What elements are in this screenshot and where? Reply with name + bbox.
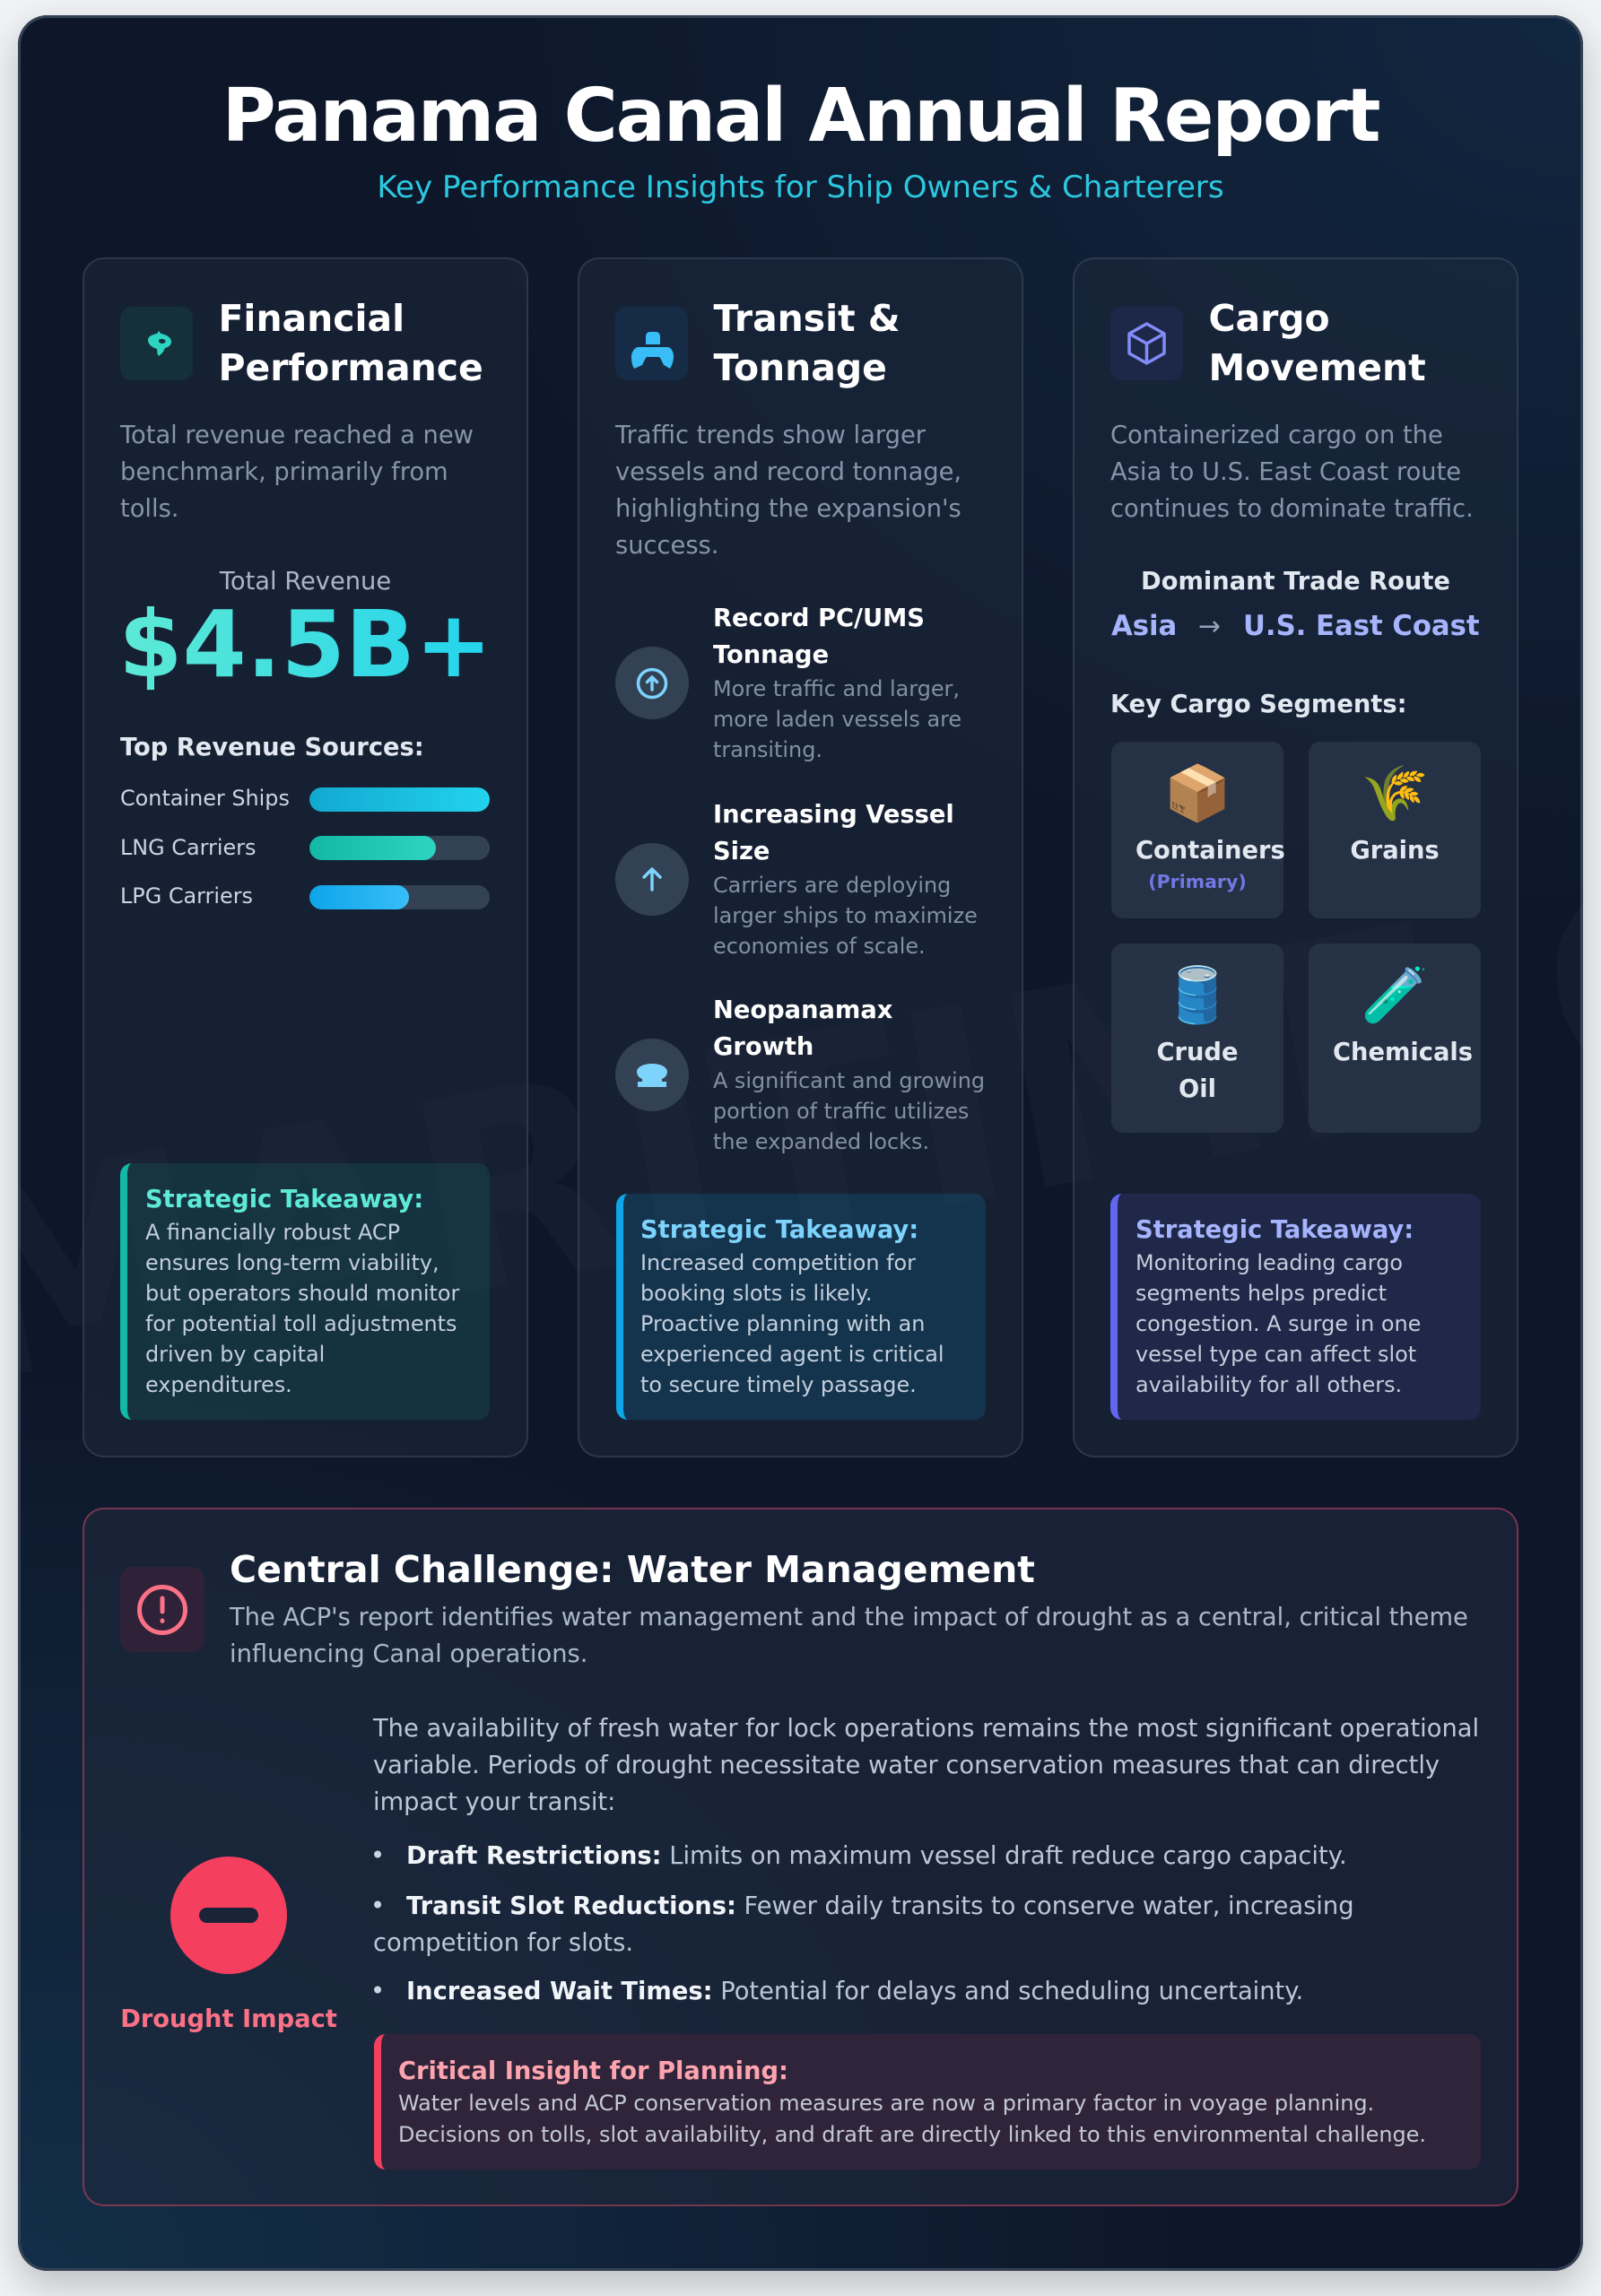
icon: minus bar xyxy=(199,1908,258,1923)
item title: Neopanamax xyxy=(713,996,892,1024)
callout text: expenditures. xyxy=(145,1372,292,1397)
item title: Growth xyxy=(713,1033,814,1061)
item: record tonnage xyxy=(615,604,961,762)
tile label: Containers xyxy=(1135,837,1285,865)
drought label: Drought Impact xyxy=(120,2005,337,2032)
list item: draft restrictions: Draft Restrictions: Limits on maximum vessel draft reduce cargo capacity. xyxy=(406,1842,1347,1870)
heading: top revenue sources: Top Revenue Sources: xyxy=(120,734,424,761)
body text xyxy=(373,1715,1479,1816)
description: tolls. xyxy=(120,495,178,523)
description xyxy=(615,422,961,560)
item text: larger ships to maximize xyxy=(713,902,978,927)
callout: financial takeaway xyxy=(120,1163,490,1420)
icon: test tube: 🧪 xyxy=(1361,963,1429,1027)
heading: financial performance: Financial xyxy=(219,297,405,340)
body text: impact your transit: xyxy=(373,1788,615,1816)
total revenue label: Total Revenue xyxy=(220,568,391,596)
description xyxy=(120,422,474,523)
tile label: Oil xyxy=(1179,1074,1216,1103)
list item: slot reductions xyxy=(370,1892,1354,1957)
tile label: Grains xyxy=(1350,837,1440,865)
callout text xyxy=(640,1250,944,1397)
panel: cargo movement xyxy=(1073,257,1518,1457)
impact list xyxy=(370,1842,1354,2005)
item text: economies of scale. xyxy=(713,933,926,958)
callout text xyxy=(145,1220,459,1397)
icon: oil drum: 🛢️ xyxy=(1163,963,1231,1027)
icon: up arrow xyxy=(615,843,689,915)
item text xyxy=(713,676,961,762)
intro text xyxy=(230,1604,1468,1668)
description: benchmark, primarily from xyxy=(120,458,448,486)
description: Total revenue reached a new xyxy=(120,422,474,449)
callout: cargo takeaway xyxy=(1110,1194,1481,1420)
callout text: A financially robust ACP xyxy=(145,1220,400,1245)
route arrow: → xyxy=(1198,611,1221,642)
bar: LPG carriers xyxy=(309,885,490,909)
tile: chemicals xyxy=(1309,944,1481,1133)
callout title: Strategic Takeaway: xyxy=(145,1186,423,1213)
heading: key cargo segments: Key Cargo Segments: xyxy=(1110,691,1407,718)
item text: transiting. xyxy=(713,737,822,762)
item text xyxy=(713,1068,985,1154)
callout text: Decisions on tolls, slot availability, and draft are directly linked to this environmental challenge. xyxy=(398,2122,1426,2147)
list item: wait times: • xyxy=(370,1977,385,2005)
item: neopanamax growth xyxy=(615,996,985,1154)
panel: financial performance xyxy=(83,257,528,1457)
icon: alert xyxy=(120,1567,204,1652)
tile label xyxy=(1157,1039,1238,1103)
heading: central challenge: Central Challenge: Water Management xyxy=(230,1548,1035,1591)
body text: The availability of fresh water for lock operations remains the most significant operational xyxy=(373,1715,1479,1743)
callout: transit takeaway xyxy=(616,1194,986,1420)
list item: slot reductions: Transit Slot Reductions: Fewer daily transits to conserve water, increasing xyxy=(406,1892,1354,1919)
icon: up arrow circle xyxy=(615,647,689,719)
intro text: The ACP's report identifies water management and the impact of drought as a central, critical theme xyxy=(230,1604,1468,1631)
tile: crude oil xyxy=(1111,944,1283,1133)
icon: grain: 🌾 xyxy=(1361,761,1429,825)
callout text: to secure timely passage. xyxy=(640,1372,917,1397)
item title: Record PC/UMS xyxy=(713,604,925,632)
icon: transit xyxy=(615,307,688,380)
tile label: Crude xyxy=(1157,1039,1238,1065)
route destination: U.S. East Coast xyxy=(1243,611,1480,642)
item text: Carriers are deploying xyxy=(713,872,951,897)
title: Panama Canal Annual Report xyxy=(222,74,1379,159)
bar: container ships xyxy=(309,787,490,812)
bar: LNG carriers xyxy=(309,836,490,860)
description xyxy=(1110,422,1474,523)
callout text: Water levels and ACP conservation measures are now a primary factor in voyage planning. xyxy=(398,2091,1374,2116)
heading: dominant trade route: Dominant Trade Route xyxy=(1141,568,1450,596)
item text xyxy=(713,872,978,958)
callout text: driven by capital xyxy=(145,1342,325,1367)
item text: more laden vessels are xyxy=(713,707,961,732)
item text: the expanded locks. xyxy=(713,1129,929,1154)
description: vessels and record tonnage, xyxy=(615,458,961,486)
drought impact graphic xyxy=(120,1857,337,2032)
item text: More traffic and larger, xyxy=(713,676,960,701)
callout text: booking slots is likely. xyxy=(640,1281,872,1306)
bar label: container ships: Container Ships xyxy=(120,786,290,811)
callout text: experienced agent is critical xyxy=(640,1342,944,1367)
callout text: availability for all others. xyxy=(1135,1372,1402,1397)
item title: Tonnage xyxy=(713,641,829,669)
callout text: but operators should monitor xyxy=(145,1281,459,1306)
trade route xyxy=(1111,611,1480,642)
callout text: Increased competition for xyxy=(640,1250,916,1275)
callout text: Monitoring leading cargo xyxy=(1135,1250,1403,1275)
heading: transit and tonnage: Tonnage xyxy=(714,346,887,389)
description: success. xyxy=(615,532,718,560)
callout title: Strategic Takeaway: xyxy=(1135,1216,1414,1244)
icon: drought xyxy=(170,1857,287,1974)
heading: cargo movement xyxy=(1209,297,1426,389)
description: Traffic trends show larger xyxy=(615,422,926,449)
body text: variable. Periods of drought necessitate water conservation measures that can directly xyxy=(373,1752,1440,1779)
tile sublabel: (Primary) xyxy=(1148,871,1247,892)
heading: financial performance: Performance xyxy=(219,346,483,389)
item title xyxy=(713,800,954,865)
heading: transit and tonnage: Transit & xyxy=(714,297,901,340)
tile: containers xyxy=(1111,742,1283,918)
bar label: LNG carriers: LNG Carriers xyxy=(120,835,256,860)
callout title: Strategic Takeaway: xyxy=(640,1216,918,1244)
heading: financial performance xyxy=(219,297,483,389)
icon: package: 📦 xyxy=(1163,761,1231,825)
item title xyxy=(713,604,925,669)
tile: grains xyxy=(1309,742,1481,918)
item text: A significant and growing xyxy=(713,1068,985,1093)
subtitle: Key Performance Insights for Ship Owners & Charterers xyxy=(377,170,1224,205)
callout text: vessel type can affect slot xyxy=(1135,1342,1416,1367)
heading: cargo movement: Movement xyxy=(1209,346,1426,389)
list item: draft restrictions: • xyxy=(370,1842,385,1870)
intro text: influencing Canal operations. xyxy=(230,1640,587,1668)
heading: cargo movement: Cargo xyxy=(1209,297,1330,340)
callout text xyxy=(398,2091,1426,2147)
bar chart: revenue sources xyxy=(120,786,490,909)
callout title: Critical Insight for Planning: xyxy=(398,2057,788,2085)
callout text: Proactive planning with an xyxy=(640,1311,925,1336)
item title: Size xyxy=(713,838,770,865)
item: vessel size xyxy=(615,800,978,958)
description: highlighting the expansion's xyxy=(615,495,961,523)
total revenue value: $4.5B+ xyxy=(118,592,492,699)
description: Asia to U.S. East Coast route xyxy=(1110,458,1461,486)
item text: portion of traffic utilizes xyxy=(713,1099,969,1124)
heading: transit and tonnage xyxy=(714,297,901,389)
list item: slot reductions: • xyxy=(370,1892,385,1919)
item title: Increasing Vessel xyxy=(713,800,954,829)
route origin: Asia xyxy=(1111,611,1177,642)
icon: locks xyxy=(615,1039,689,1111)
description: continues to dominate traffic. xyxy=(1110,495,1474,523)
panel: transit and tonnage xyxy=(578,257,1023,1457)
callout text: ensures long-term viability, xyxy=(145,1250,439,1275)
tile label: Chemicals xyxy=(1333,1039,1473,1065)
callout text: for potential toll adjustments xyxy=(145,1311,457,1336)
icon: cargo box xyxy=(1110,307,1183,380)
callout text: congestion. A surge in one xyxy=(1135,1311,1421,1336)
callout: critical insight xyxy=(374,2034,1481,2170)
list item: wait times: Increased Wait Times: Potential for delays and scheduling uncertainty. xyxy=(406,1977,1303,2005)
description: Containerized cargo on the xyxy=(1110,422,1443,449)
callout text xyxy=(1135,1250,1421,1397)
list item: slot reductions: competition for slots. xyxy=(373,1928,633,1957)
panel: water management xyxy=(83,1508,1518,2206)
bar label: LPG carriers: LPG Carriers xyxy=(120,883,253,909)
callout text: segments helps predict xyxy=(1135,1281,1387,1306)
item title xyxy=(713,996,892,1061)
icon: finance xyxy=(120,307,193,380)
